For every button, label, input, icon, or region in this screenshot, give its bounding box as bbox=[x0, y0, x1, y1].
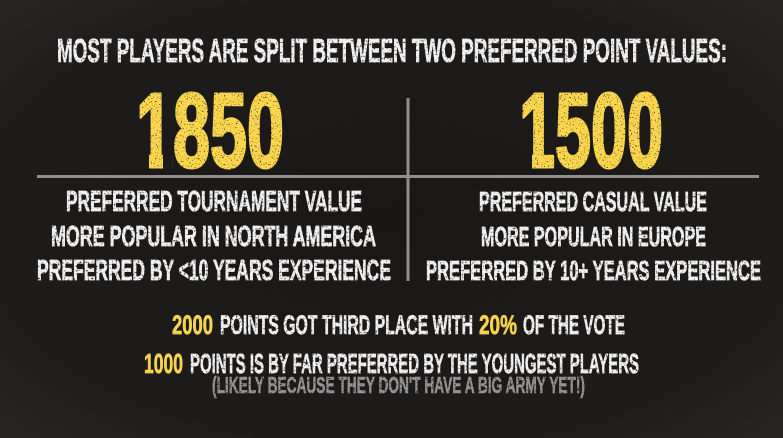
big number: 1850: 1850 bbox=[136, 72, 284, 190]
panel: 1850 bbox=[38, 92, 391, 281]
text block: 1500 details bbox=[426, 186, 761, 286]
text block: 1850 details: PREFERRED BY <10 YEARS EXPERIENCE bbox=[37, 255, 391, 287]
note: 2000 points: OF THE VOTE bbox=[523, 310, 625, 340]
note: 2000 points: 2000 bbox=[172, 310, 213, 340]
text block: 1850 details: PREFERRED TOURNAMENT VALUE bbox=[66, 186, 362, 218]
text block: 1850 details: MORE POPULAR IN NORTH AMERICA bbox=[51, 221, 376, 253]
note: 1000 points: 1000 bbox=[144, 348, 183, 379]
divider: horizontal and vertical lines bbox=[37, 98, 759, 281]
panel: 1500 bbox=[426, 92, 761, 281]
big number: 1500: 1500 bbox=[519, 72, 663, 190]
note: 2000 points: 20% bbox=[479, 310, 517, 340]
text block: 1850 details bbox=[37, 186, 391, 287]
note: 2000 points: POINTS GOT THIRD PLACE WITH bbox=[220, 310, 473, 340]
